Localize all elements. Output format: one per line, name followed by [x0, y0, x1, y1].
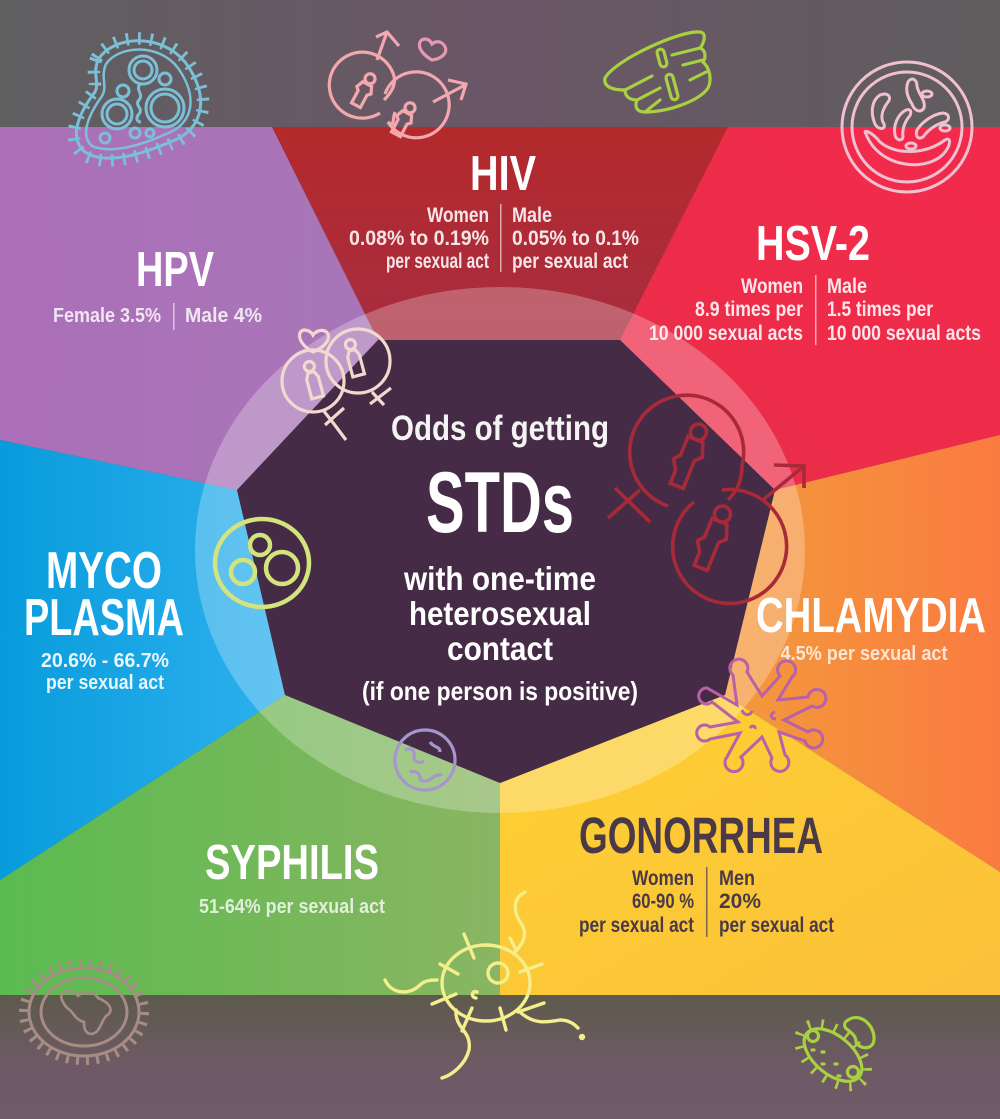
panel: HIV — [272, 127, 728, 340]
Gonorrhea text: GONORRHEA — [579, 807, 823, 864]
icon: couple in center right — [608, 395, 804, 603]
icon: mycoplasma cell — [215, 519, 309, 607]
central text — [362, 409, 638, 706]
Gonorrhea text — [579, 807, 834, 937]
central heptagon — [237, 340, 775, 783]
Mycoplasma text: PLASMA — [24, 589, 184, 647]
Syphilis text — [199, 836, 385, 918]
HPV text — [53, 243, 262, 330]
panel: HPV — [0, 127, 378, 490]
bottom band — [0, 994, 1000, 1119]
icon: round microbe bottom left — [24, 964, 144, 1060]
panel: Mycoplasma — [0, 440, 285, 880]
HSV-2 text: Male — [827, 275, 867, 298]
Syphilis text: SYPHILIS — [205, 836, 379, 890]
Gonorrhea text: 60-90 % — [632, 890, 694, 913]
icon: flagellated bacterium bottom — [385, 892, 584, 1078]
HSV-2 text: 1.5 times per — [827, 298, 933, 321]
Chlamydia text: 4.5% per sexual act — [780, 643, 948, 665]
Mycoplasma text — [24, 542, 184, 694]
HIV text: 0.08% to 0.19% — [349, 227, 489, 250]
icon: virus — [697, 659, 826, 772]
icon: small round microbe — [395, 730, 455, 790]
Gonorrhea text: per sexual act — [579, 914, 694, 937]
HPV text: Male 4% — [185, 305, 262, 327]
icon: bacterium top left — [74, 38, 203, 161]
panel: HSV-2 — [620, 127, 1000, 490]
central text: heterosexual — [409, 595, 591, 632]
icon: couple symbols top — [329, 32, 466, 138]
central text: Odds of getting — [391, 409, 609, 448]
panel: Chlamydia — [725, 435, 1000, 872]
Gonorrhea text: Men — [719, 867, 755, 890]
HIV text: Women — [427, 204, 489, 227]
HIV text: Male — [512, 204, 552, 227]
Mycoplasma text: MYCO — [46, 542, 162, 600]
Gonorrhea text: 20% — [719, 890, 761, 913]
central text: (if one person is positive) — [362, 676, 638, 706]
top band — [0, 0, 1000, 128]
panel: Gonorrhea — [500, 695, 1000, 995]
Gonorrhea text: Women — [632, 867, 694, 890]
HSV-2 text: HSV-2 — [756, 217, 870, 271]
Chlamydia text — [756, 589, 986, 665]
translucent ring — [195, 287, 805, 813]
HSV-2 text: 8.9 times per — [695, 298, 803, 321]
HSV-2 text: Women — [741, 275, 803, 298]
HPV text: Female 3.5% — [53, 305, 161, 327]
central text: contact — [447, 630, 553, 667]
central text: with one-time — [403, 560, 596, 597]
Gonorrhea text: per sexual act — [719, 914, 834, 937]
HIV text: per sexual act — [386, 250, 489, 273]
Mycoplasma text: 20.6% - 66.7% — [41, 650, 169, 672]
HSV-2 text — [649, 217, 981, 345]
HIV text: HIV — [470, 147, 536, 201]
central text: STDs — [426, 455, 574, 551]
icon: couple in center left — [282, 329, 391, 440]
icon: circular microbe top right — [842, 62, 972, 192]
icon: bacterium bottom right — [787, 1011, 879, 1099]
HIV text — [349, 147, 639, 273]
panel: Syphilis — [0, 695, 500, 995]
HSV-2 text: 10 000 sexual acts — [649, 322, 803, 345]
HPV text: HPV — [136, 243, 214, 297]
HIV text: per sexual act — [512, 250, 628, 273]
Syphilis text: 51-64% per sexual act — [199, 896, 385, 918]
icon: diatom top right — [605, 32, 710, 112]
HIV text: 0.05% to 0.1% — [512, 227, 639, 250]
Mycoplasma text: per sexual act — [46, 672, 164, 694]
